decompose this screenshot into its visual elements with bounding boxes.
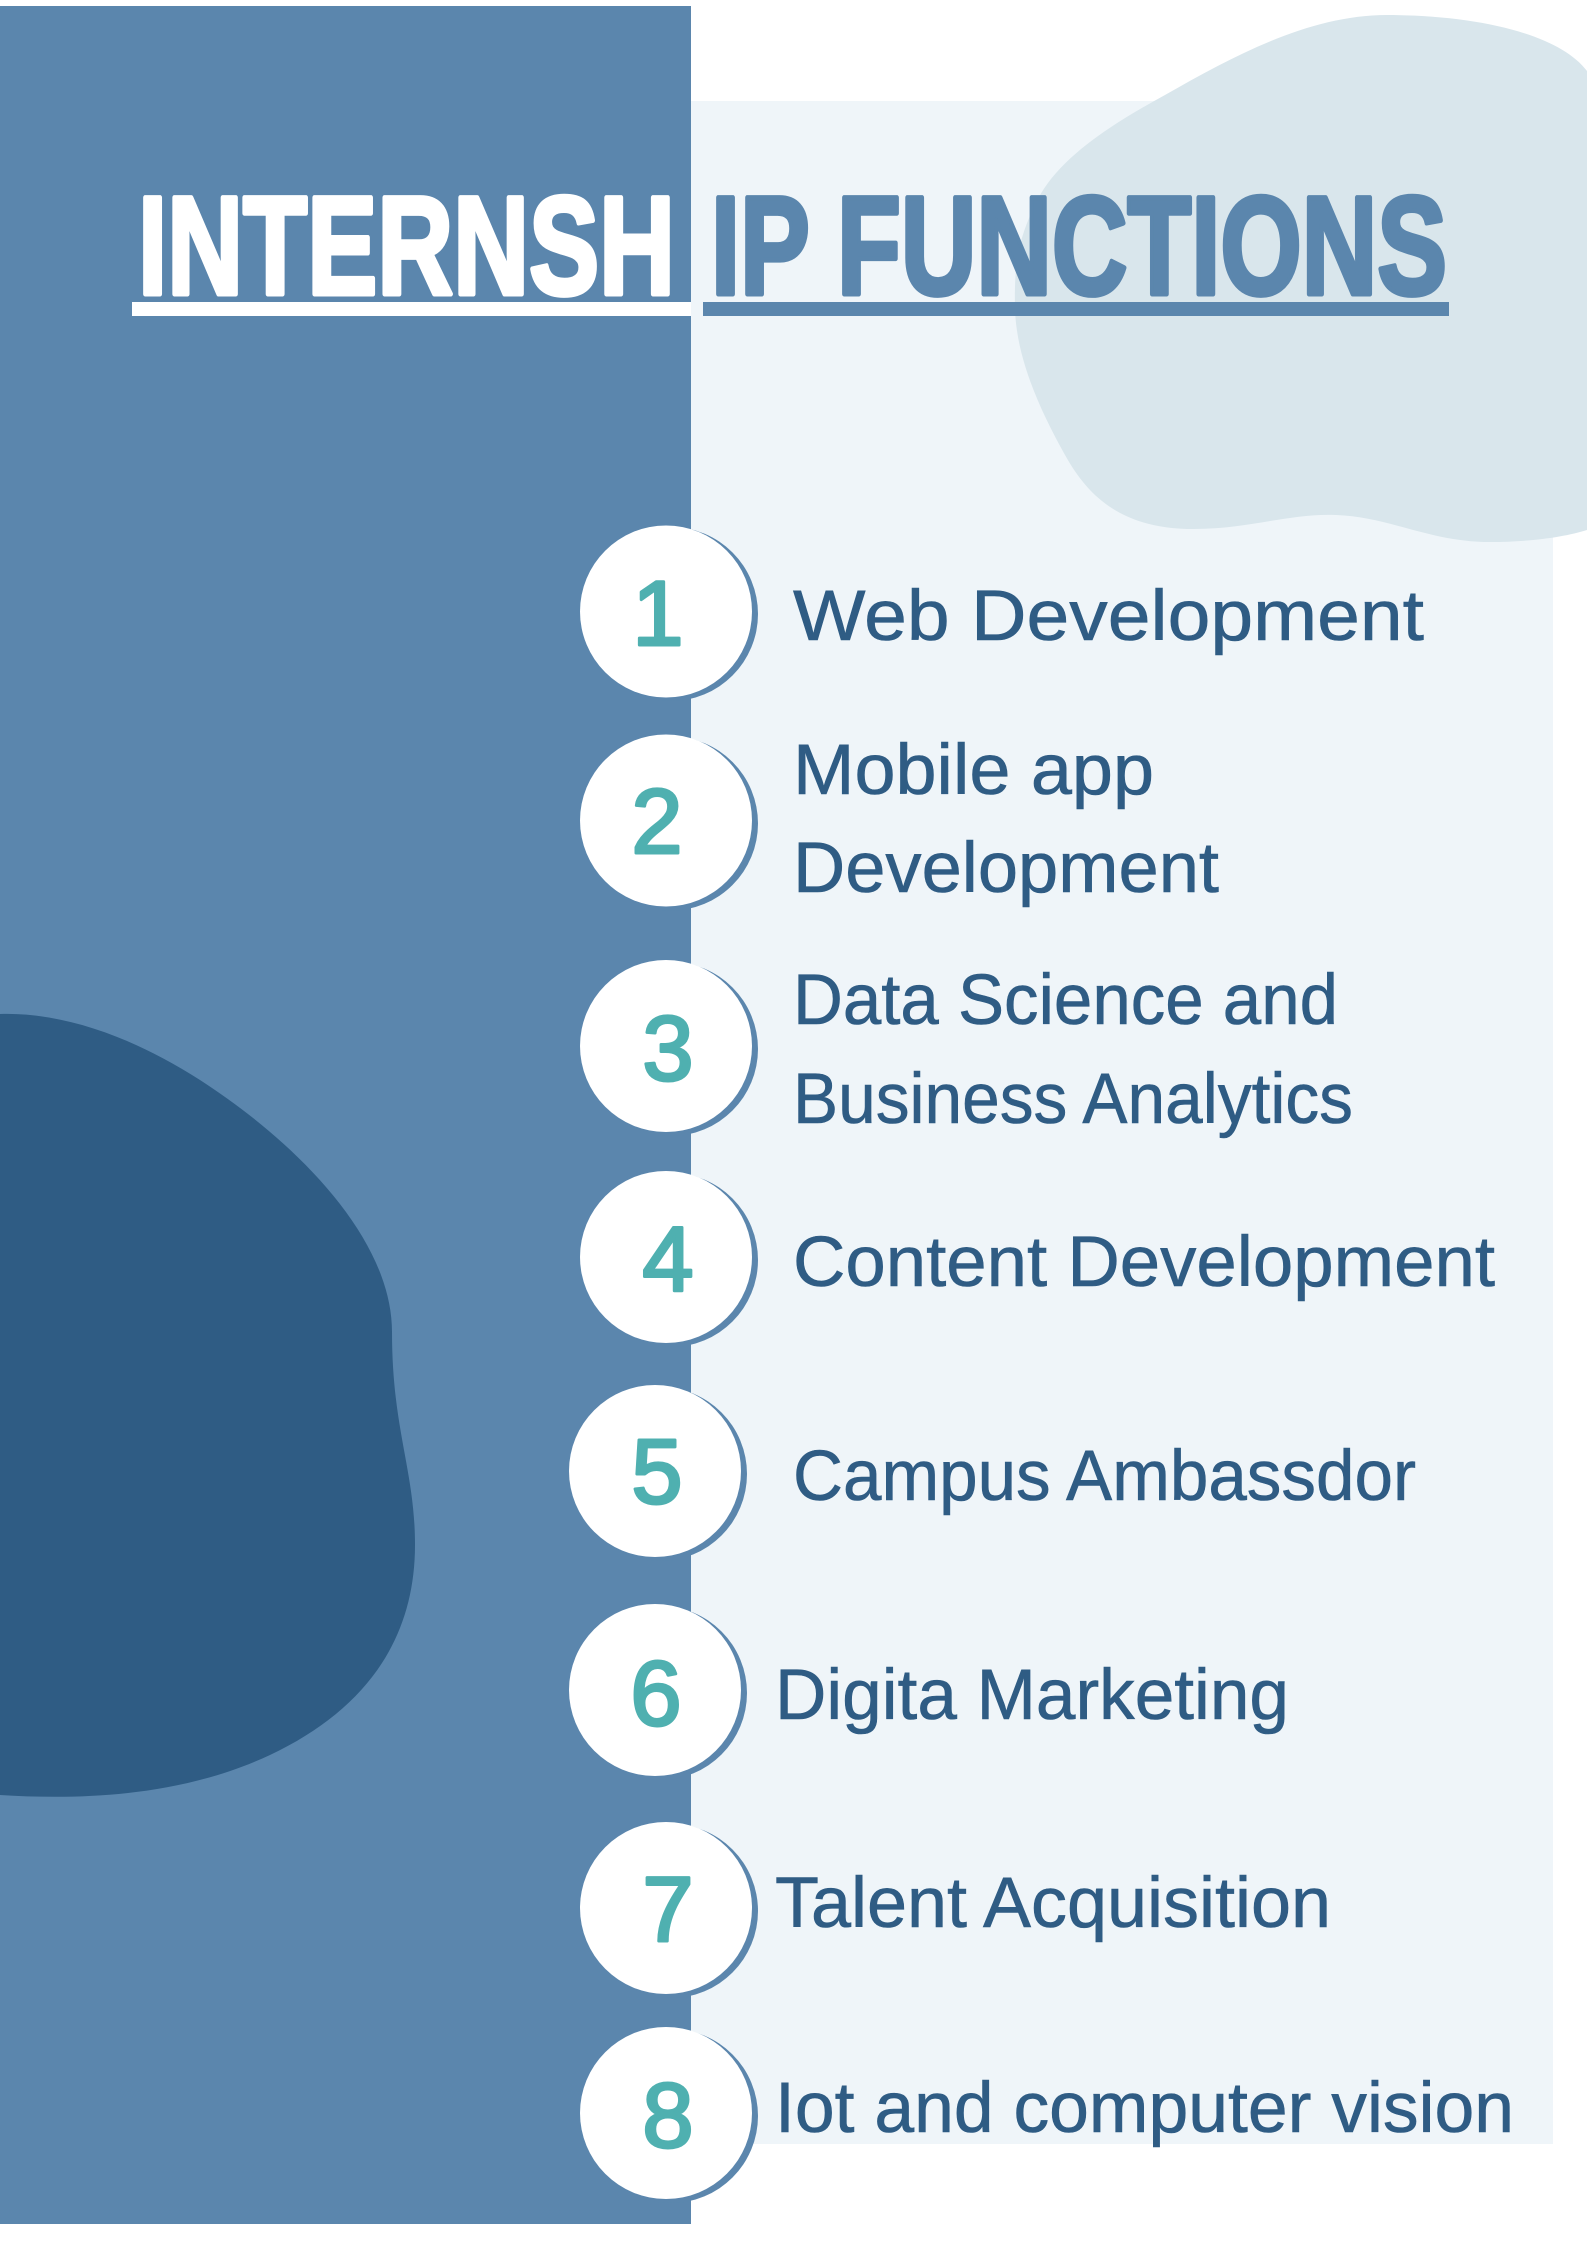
badge shadow 8 [584, 2029, 758, 2203]
number 7: 7 [642, 1859, 694, 1961]
label 4: Content Development [793, 1223, 1495, 1302]
badge shadow 4 [584, 1173, 758, 1347]
badge 5 [569, 1385, 741, 1557]
badge 8 [580, 2027, 752, 2199]
number 2: 2 [631, 771, 683, 873]
badge 2 [580, 734, 752, 906]
label 5: Campus Ambassdor [793, 1437, 1416, 1516]
badge shadow 6 [573, 1606, 747, 1780]
badge 7 [580, 1822, 752, 1994]
label 1: Web Development [793, 577, 1424, 656]
title [132, 167, 1449, 324]
title underline: white [132, 302, 691, 316]
item 1 [580, 526, 1424, 701]
panel: light background [691, 101, 1553, 2144]
badge 1 [580, 526, 752, 698]
blob: left dark shape [0, 1014, 415, 1797]
number 8: 8 [642, 2065, 694, 2167]
item 2 [580, 731, 1219, 910]
title underline: blue [703, 302, 1449, 316]
label 6: Digita Marketing [775, 1656, 1289, 1735]
label 3 second line: Business Analytics [793, 1060, 1353, 1139]
blob: top right pale shape [1015, 15, 1587, 542]
label 3: Data Science and [793, 961, 1338, 1040]
item 4 [580, 1171, 1495, 1347]
label 2: Mobile app [793, 731, 1154, 810]
label 7: Talent Acquisition [775, 1864, 1331, 1943]
item 5 [569, 1385, 1416, 1561]
title: white part: INTERNSH [138, 167, 675, 324]
number 6: 6 [630, 1643, 682, 1745]
badge shadow 3 [584, 962, 758, 1136]
label 2 second line: Development [793, 829, 1219, 908]
badge shadow 5 [573, 1387, 747, 1561]
item 6 [569, 1604, 1289, 1780]
item 3 [580, 960, 1353, 1139]
number 4: 4 [642, 1209, 694, 1311]
number 1: 1 [632, 563, 684, 665]
badge shadow 7 [584, 1824, 758, 1998]
label 8: Iot and computer vision [775, 2069, 1514, 2148]
badge 4 [580, 1171, 752, 1343]
badge 6 [569, 1604, 741, 1776]
item 7 [580, 1822, 1331, 1998]
item 8 [580, 2027, 1514, 2203]
number 3: 3 [642, 998, 694, 1100]
badge shadow 2 [584, 736, 758, 910]
badge 3 [580, 960, 752, 1132]
panel: left blue column [0, 6, 691, 2224]
badge shadow 1 [584, 527, 758, 701]
number 5: 5 [631, 1421, 683, 1523]
